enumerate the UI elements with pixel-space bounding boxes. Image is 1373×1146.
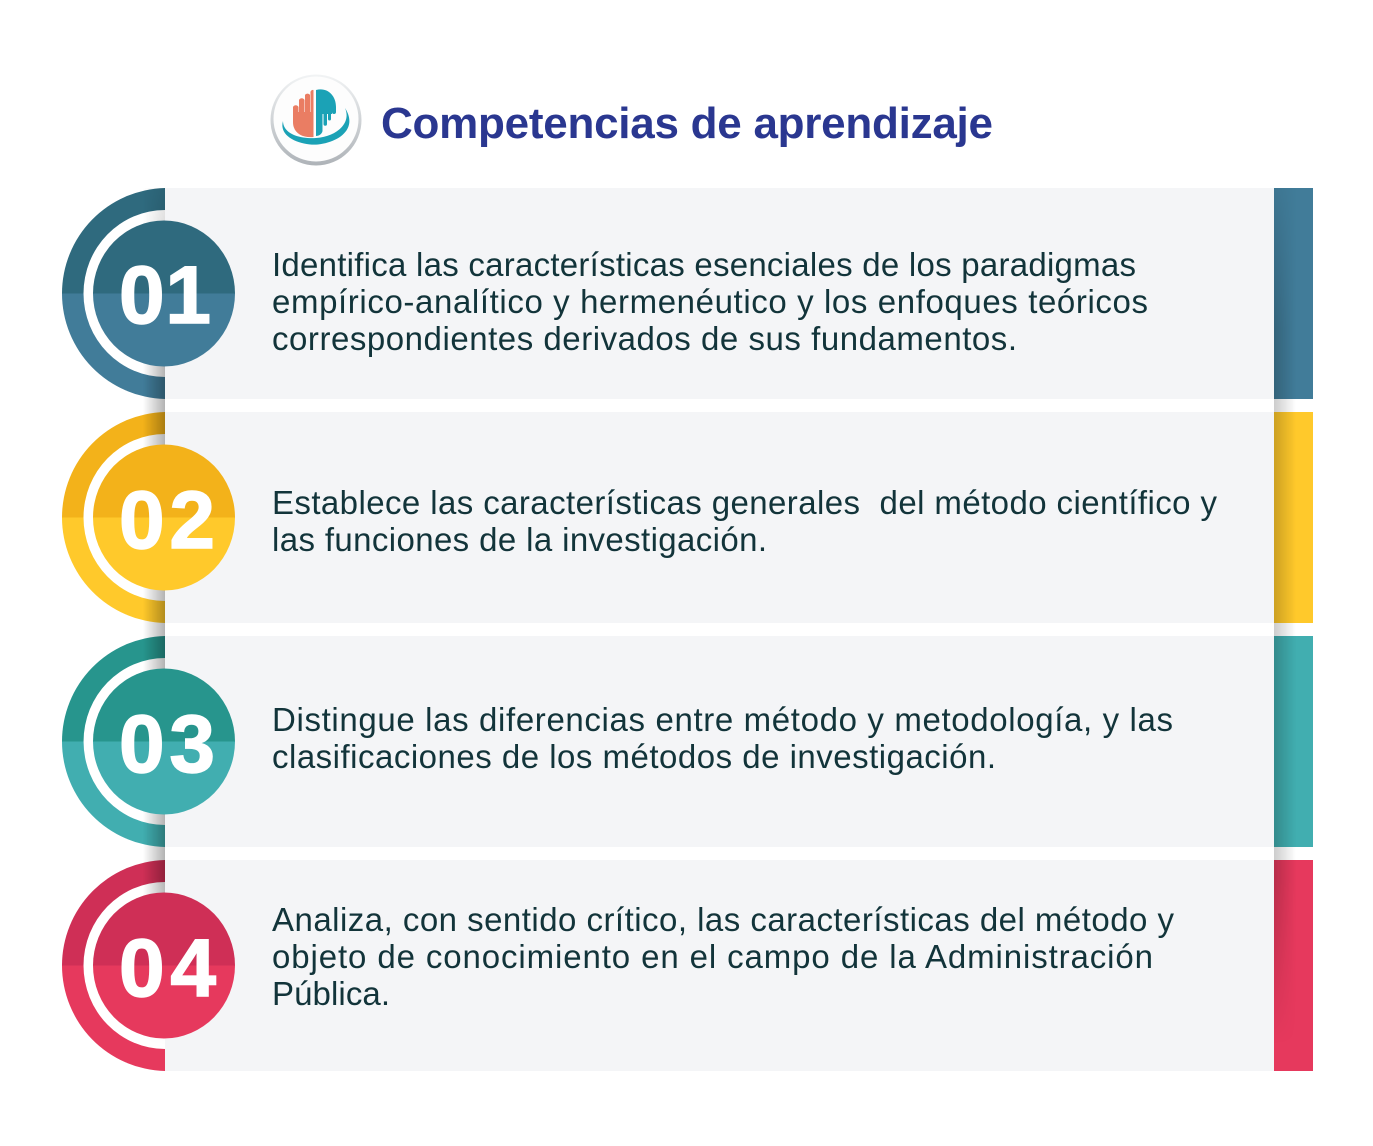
right colour bar 01 — [1274, 188, 1313, 399]
text panel background 04 — [165, 860, 1274, 1071]
panel: competencia 01 — [62, 188, 1313, 412]
number 03: 03 — [119, 699, 215, 790]
shadow strips 04 — [146, 860, 1292, 1016]
shadow strips 02 — [143, 412, 1296, 636]
number 04: 04 — [119, 923, 216, 1014]
text 04: Pública. — [272, 975, 390, 1012]
text 04 — [272, 901, 1174, 1012]
text 01 — [272, 246, 1148, 357]
panel: competencia 04 — [62, 860, 1313, 1071]
right colour bar 04 — [1274, 860, 1313, 1071]
text 04: objeto de conocimiento en el campo de la Administración — [272, 938, 1153, 975]
text 01: correspondientes derivados de sus fundamentos. — [272, 320, 1017, 357]
text 03: Distingue las diferencias entre método y metodología, y las — [272, 701, 1173, 738]
right colour bar 03 — [1274, 636, 1313, 847]
shadow strips 03 — [143, 636, 1296, 860]
text 01: empírico-analítico y hermenéutico y los enfoques teóricos — [272, 283, 1148, 320]
white ring 03 — [84, 658, 165, 825]
outer arc 02 — [62, 412, 165, 623]
text panel background 03 — [165, 636, 1274, 847]
text 02: Establece las características generales del método científico y — [272, 484, 1218, 521]
text 02: las funciones de la investigación. — [272, 521, 767, 558]
shadow strips 01 — [143, 188, 1296, 412]
number 02: 02 — [119, 475, 215, 566]
white ring 02 — [84, 434, 165, 601]
outer arc 04 — [62, 860, 165, 1071]
icon: hands logo badge — [270, 74, 362, 166]
number circle 02 — [93, 445, 235, 590]
panel: competencia 03 — [62, 636, 1313, 860]
number circle 01 — [93, 221, 235, 366]
text 02 — [272, 484, 1218, 558]
text panel background 02 — [165, 412, 1274, 623]
text 01: Identifica las características esenciales de los paradigmas — [272, 246, 1136, 283]
right colour bar 02 — [1274, 412, 1313, 623]
text panel background 01 — [165, 188, 1274, 399]
text 03: clasificaciones de los métodos de investigación. — [272, 738, 996, 775]
number circle 03 — [93, 669, 235, 814]
outer arc 01 — [62, 188, 165, 399]
text 04: Analiza, con sentido crítico, las características del método y — [272, 901, 1174, 938]
text 03 — [272, 701, 1173, 775]
white ring 01 — [84, 210, 165, 377]
outer arc 03 — [62, 636, 165, 847]
white ring 04 — [84, 882, 165, 1049]
number 01: 01 — [119, 250, 211, 341]
panel: competencia 02 — [62, 412, 1313, 636]
title: Competencias de aprendizaje — [381, 99, 993, 148]
number circle 04 — [93, 893, 235, 1038]
